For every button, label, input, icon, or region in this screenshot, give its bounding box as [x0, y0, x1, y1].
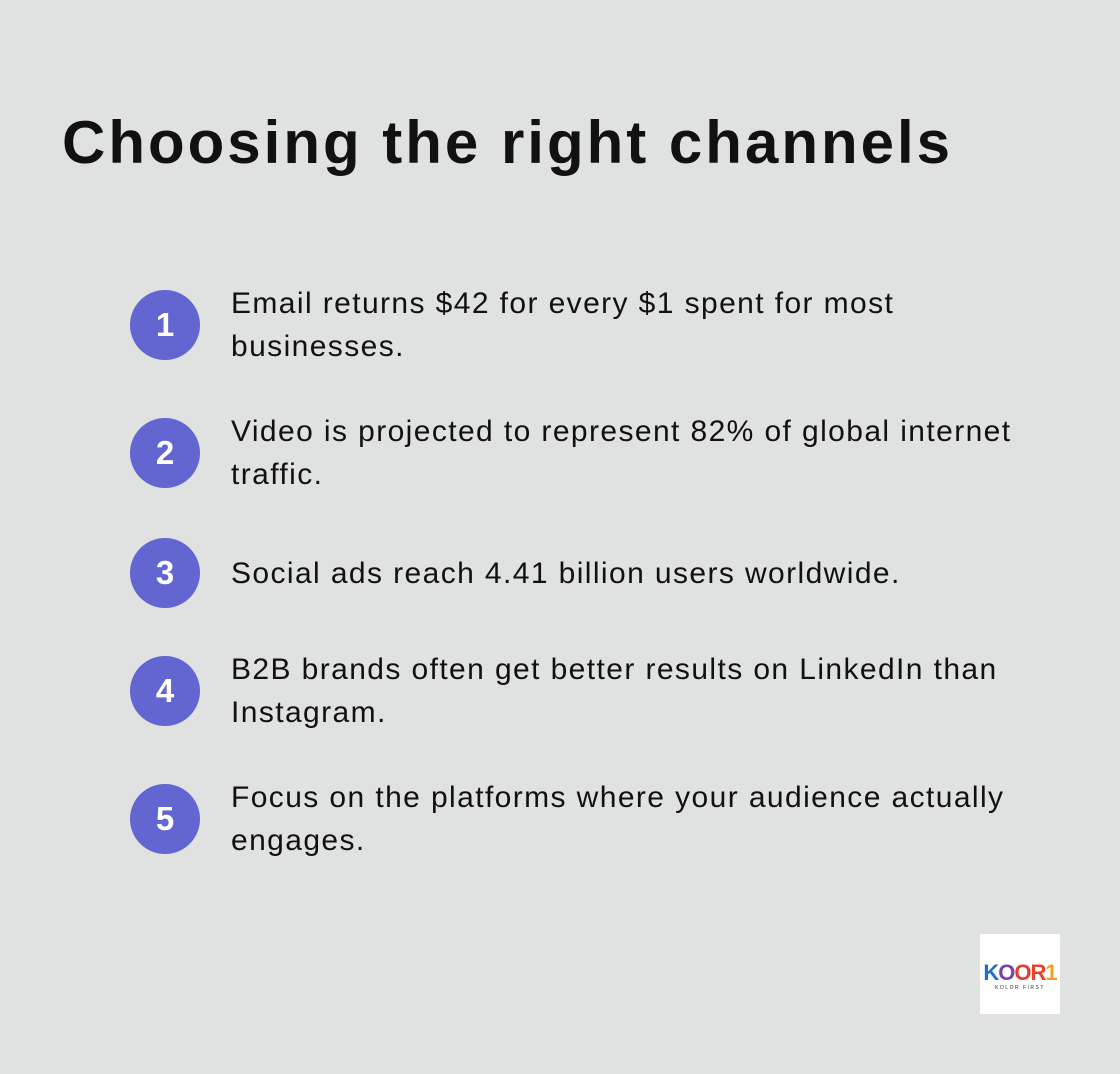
badge 1: 1	[156, 306, 174, 343]
badge 4	[130, 656, 200, 726]
item 2	[130, 415, 1012, 491]
item 5	[130, 781, 1004, 857]
badge 5: 5	[156, 800, 174, 837]
badge 3: 3	[156, 554, 174, 591]
text 1	[231, 287, 894, 363]
item 3	[130, 538, 901, 608]
text 1: Email returns $42 for every $1 spent for most	[231, 287, 894, 320]
logo: KOLOR FIRST	[995, 985, 1045, 991]
badge 1	[130, 290, 200, 360]
text 4	[231, 653, 998, 729]
text 5	[231, 781, 1004, 857]
text 3: Social ads reach 4.41 billion users worldwide.	[231, 557, 901, 590]
badge 4: 4	[156, 672, 174, 709]
text 5: engages.	[231, 824, 366, 857]
text 2: Video is projected to represent 82% of global internet	[231, 415, 1012, 448]
logo: KOOR1	[983, 960, 1057, 985]
item 4	[130, 653, 998, 729]
text 2	[231, 415, 1012, 491]
text 2: traffic.	[231, 458, 323, 491]
text 5: Focus on the platforms where your audience actually	[231, 781, 1004, 814]
title: Choosing the right channels	[62, 109, 953, 176]
text 4: B2B brands often get better results on LinkedIn than	[231, 653, 998, 686]
badge 3	[130, 538, 200, 608]
badge 5	[130, 784, 200, 854]
logo	[980, 934, 1060, 1014]
item 1	[130, 287, 894, 363]
text 4: Instagram.	[231, 696, 387, 729]
badge 2: 2	[156, 434, 174, 471]
text 1: businesses.	[231, 330, 405, 363]
badge 2	[130, 418, 200, 488]
